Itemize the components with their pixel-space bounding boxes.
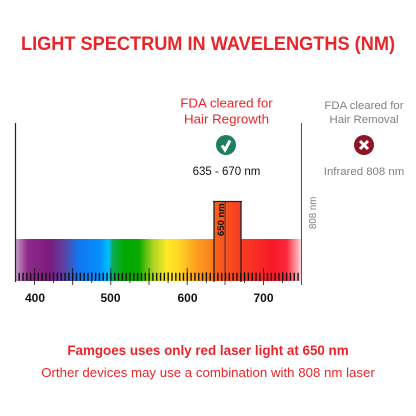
- footer line 1: Famgoes uses only red laser light at 650 nm: [67, 343, 349, 358]
- heading: FDA cleared for hair removal: FDA cleared for: [324, 100, 404, 112]
- heading: FDA cleared for hair regrowth: FDA cleared for: [180, 96, 273, 110]
- infrared label: Infrared 808 nm: [324, 166, 404, 178]
- 650 nm label: 650 nm: [216, 203, 227, 236]
- heading: FDA cleared for hair regrowth: Hair Regrowth: [184, 112, 269, 126]
- icon: red cross: [354, 135, 374, 155]
- footer line 2: Orther devices may use a combination with 808 nm laser: [41, 365, 375, 380]
- title: LIGHT SPECTRUM IN WAVELENGTHS (NM): [21, 33, 395, 55]
- spectrum band: [16, 239, 301, 281]
- left axis: [14, 123, 16, 282]
- axis labels: 600: [177, 291, 198, 305]
- icon: green check: [216, 135, 236, 155]
- axis labels: 400: [25, 291, 45, 305]
- axis labels: [25, 291, 274, 305]
- heading: FDA cleared for hair removal: Hair Removal: [330, 114, 398, 126]
- axis labels: 500: [100, 291, 121, 305]
- footer text: [41, 343, 375, 380]
- heading: FDA cleared for hair regrowth: [180, 96, 273, 126]
- 808 nm label: 808 nm: [308, 197, 319, 229]
- panel: hair removal clearance: [324, 100, 404, 178]
- right axis: [300, 123, 302, 285]
- axis labels: 700: [253, 291, 274, 305]
- spectrum chart: [16, 123, 319, 305]
- highlighted band 635-670 nm: [213, 201, 242, 285]
- panel: hair regrowth clearance: [180, 96, 273, 178]
- wavelength range: 635 - 670 nm: [193, 166, 260, 178]
- heading: FDA cleared for hair removal: [324, 100, 404, 126]
- tick marks: [18, 268, 300, 285]
